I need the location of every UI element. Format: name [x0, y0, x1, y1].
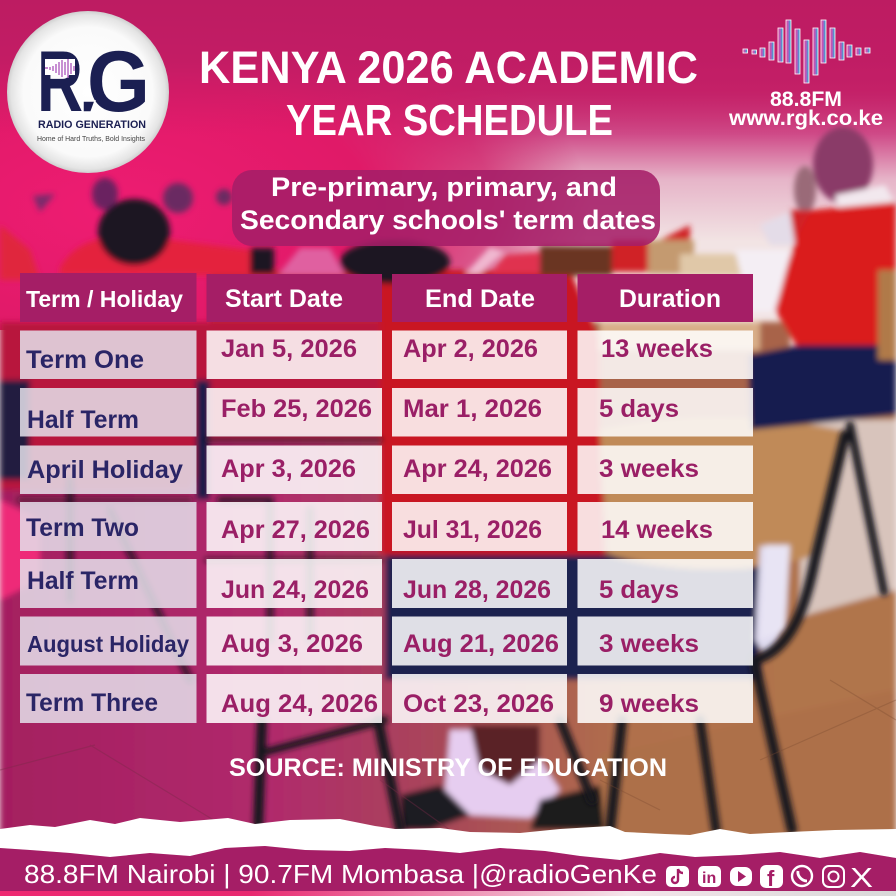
- logo tagline: Home of Hard Truths, Bold Insights: [37, 136, 145, 143]
- subtitle pill: Secondary schools' term dates: [240, 205, 656, 235]
- row: Term Three: Oct 23, 2026: [403, 690, 554, 718]
- row: Half Term (February): 5 days: [599, 395, 679, 423]
- row: Term One: Term One: [26, 346, 144, 374]
- row: Term Three: Term Three: [26, 689, 158, 717]
- row: August Holiday: Aug 3, 2026: [221, 630, 363, 658]
- frequency: 88.8FM: [770, 88, 842, 111]
- logo waveform: [45, 59, 75, 78]
- footer band with torn paper edge: [0, 818, 896, 896]
- table header row: Duration: [619, 285, 721, 313]
- icon: sound waveform: [743, 20, 870, 83]
- row: Term One: Apr 2, 2026: [403, 335, 538, 363]
- station logo: waveform, frequency and website: [728, 20, 883, 130]
- table header row: Term / Holiday: [26, 286, 183, 312]
- logo letter R: R: [37, 34, 83, 130]
- row: Half Term (June): Half Term: [27, 567, 139, 595]
- title: KENYA 2026 ACADEMIC: [199, 42, 698, 93]
- subtitle pill: Pre-primary, primary, and: [271, 172, 617, 202]
- row: Half Term (February): Feb 25, 2026: [221, 395, 372, 423]
- icon: TikTok: [666, 866, 689, 887]
- row: Half Term (June): [20, 559, 753, 608]
- row: Term One: Jan 5, 2026: [221, 335, 357, 363]
- title: [199, 42, 698, 145]
- schedule table: [20, 273, 753, 723]
- row: Term Three: [20, 674, 753, 723]
- logo dot: [83, 101, 95, 112]
- icon: LinkedIn: in: [702, 870, 716, 887]
- icon: X: X: [850, 862, 873, 893]
- row: Half Term (February): Half Term: [27, 406, 139, 434]
- row: Term Two: Jul 31, 2026: [403, 516, 542, 544]
- row: Term Two: [20, 502, 753, 551]
- row: August Holiday: 3 weeks: [599, 630, 699, 658]
- icon: LinkedIn: [698, 866, 721, 887]
- social icons: [666, 862, 873, 893]
- magenta band: [0, 846, 896, 891]
- title: YEAR SCHEDULE: [286, 96, 613, 145]
- logo name: RADIO GENERATION: [38, 119, 146, 131]
- row: Half Term (June): Jun 24, 2026: [221, 576, 369, 604]
- row: Term Two: Apr 27, 2026: [221, 516, 370, 544]
- logo: Radio Generation badge: [7, 11, 169, 173]
- icon: Instagram: [823, 866, 844, 887]
- table header row: End Date: [425, 285, 535, 313]
- row: Term Two: Term Two: [26, 514, 139, 542]
- website: www.rgk.co.ke: [728, 107, 883, 130]
- row: April Holiday: Apr 3, 2026: [221, 455, 356, 483]
- row: August Holiday: August Holiday: [27, 631, 189, 657]
- row: Term Three: Aug 24, 2026: [221, 690, 378, 718]
- table header row: [20, 273, 753, 322]
- icon: WhatsApp: [792, 866, 812, 886]
- row: Half Term (February): [20, 388, 753, 436]
- station frequencies and handle: 88.8FM Nairobi | 90.7FM Mombasa |@radioGenKe: [24, 859, 657, 889]
- bottom gradient stripe: [0, 891, 896, 896]
- row: Half Term (June): 5 days: [599, 576, 679, 604]
- row: April Holiday: 3 weeks: [599, 455, 699, 483]
- row: Term One: [20, 330, 753, 379]
- row: Term Two: 14 weeks: [601, 516, 713, 544]
- row: August Holiday: Aug 21, 2026: [403, 630, 559, 658]
- torn paper strip: [0, 818, 896, 860]
- subtitle pill: [232, 170, 660, 246]
- icon: YouTube: [730, 867, 752, 886]
- table header row: Start Date: [225, 285, 343, 313]
- row: Term One: 13 weeks: [601, 335, 713, 363]
- row: April Holiday: April Holiday: [27, 456, 183, 484]
- source note: SOURCE: MINISTRY OF EDUCATION: [229, 754, 667, 782]
- row: August Holiday: [20, 616, 753, 666]
- row: Half Term (February): Mar 1, 2026: [403, 395, 542, 423]
- row: Half Term (June): Jun 28, 2026: [403, 576, 551, 604]
- row: April Holiday: Apr 24, 2026: [403, 455, 552, 483]
- logo letter G: G: [87, 34, 150, 130]
- icon: Facebook: [760, 865, 783, 891]
- icon: Facebook: f: [767, 866, 775, 891]
- row: Term Three: 9 weeks: [599, 690, 699, 718]
- row: April Holiday: [20, 446, 753, 494]
